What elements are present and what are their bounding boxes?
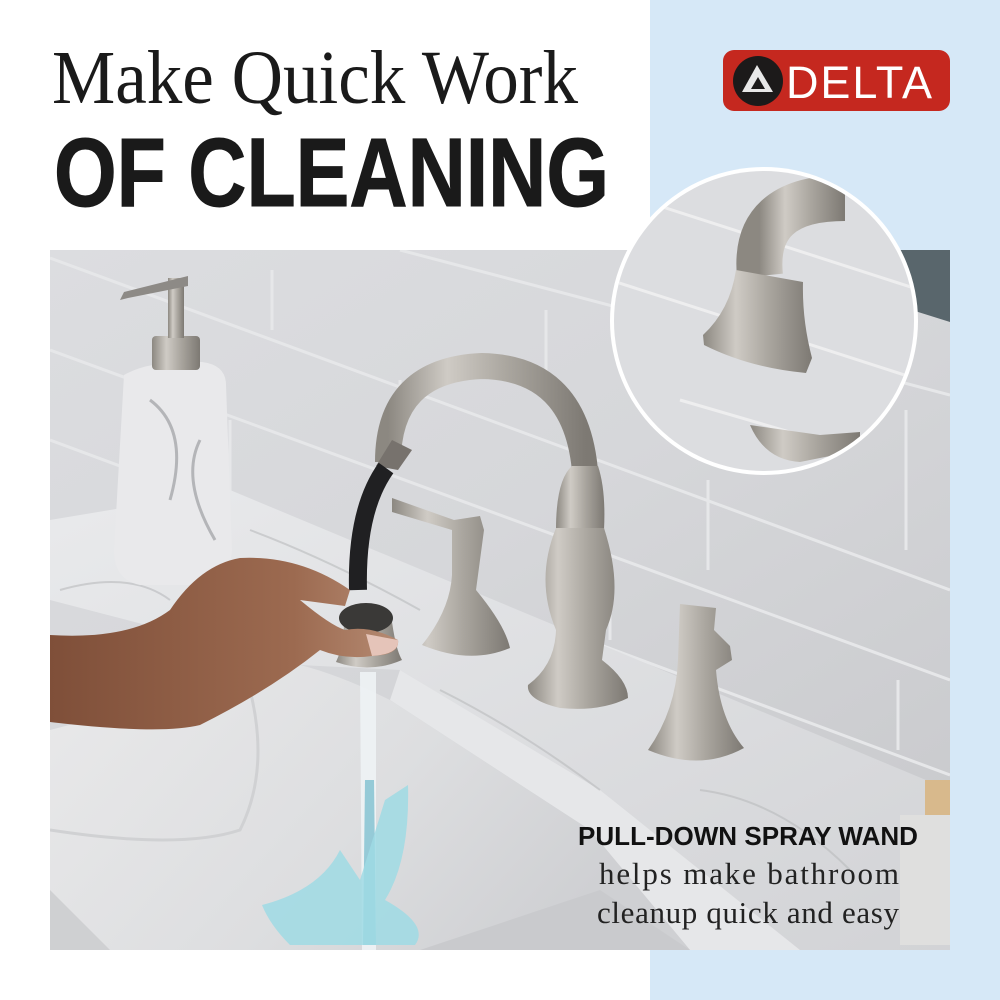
background panel: light blue [650,0,1000,1000]
logo: Delta: DELTA [786,57,932,108]
caption: helps make bathroom [599,856,899,891]
bottle bottom right [900,780,950,945]
inset circle: spray head close-up [610,167,920,480]
hose [358,468,386,590]
blue soap splash [262,785,419,945]
logo: Delta [723,50,950,111]
title: Make Quick Work [52,36,578,120]
title [52,36,609,227]
caption: PULL-DOWN SPRAY WAND [578,821,918,851]
right handle [648,604,744,761]
spray head [336,622,402,668]
marble counter [50,490,950,950]
water stream [360,672,376,950]
photo: bathroom faucet scene [50,250,950,950]
tiled wall [50,250,950,800]
hand and arm [50,558,398,729]
sink basin [50,665,690,950]
faucet [336,366,744,761]
soap dispenser [114,276,232,585]
caption: cleanup quick and easy [597,895,900,930]
title: OF CLEANING [54,118,609,227]
caption [578,821,918,930]
left handle [392,498,510,656]
